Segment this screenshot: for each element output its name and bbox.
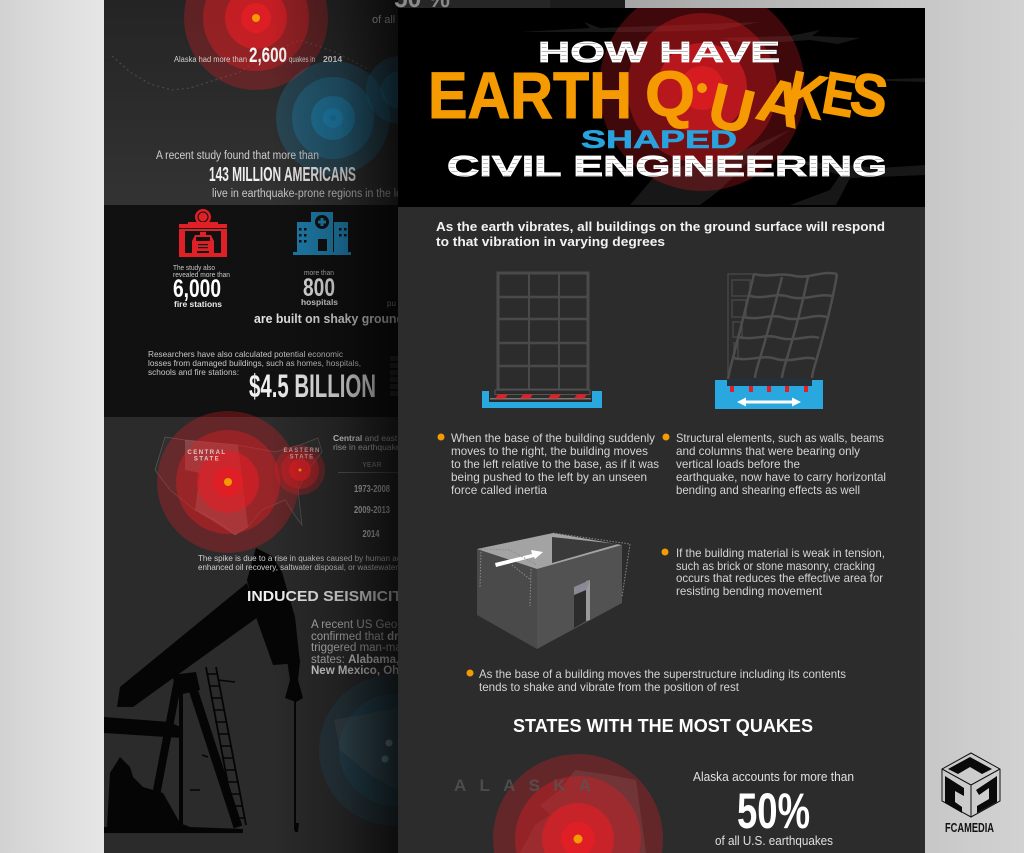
heading: induced seismicity: INDUCED SEISMICIT bbox=[247, 588, 402, 605]
illustration: building at rest bbox=[482, 273, 602, 408]
text: 143 million Americans bbox=[156, 150, 402, 200]
map: Alaska outline bbox=[520, 770, 646, 853]
icon: red quake rings bbox=[599, 0, 805, 191]
text: eastern state label: EASTERN bbox=[283, 448, 321, 454]
text: 143 million Americans: 143 MILLION AMERICANS bbox=[209, 164, 356, 186]
text: inertia bullet: When the base of the building suddenly bbox=[451, 431, 655, 445]
text: spike note: The spike is due to a rise in quakes caused by human act bbox=[198, 553, 404, 563]
title: S bbox=[846, 60, 892, 131]
panel: background infographic page bbox=[104, 0, 398, 853]
text: 800 hospitals bbox=[301, 270, 396, 308]
text: spike note bbox=[198, 555, 398, 572]
title: U bbox=[702, 71, 761, 148]
text: material bullet bbox=[662, 546, 885, 598]
icon: dim blue quake map bbox=[319, 676, 398, 824]
chart: dark bars bbox=[390, 356, 398, 396]
text: 4.5 billion: $4.5 BILLION bbox=[249, 368, 376, 404]
text: induced seismicity body: triggered man-mac bbox=[311, 642, 408, 654]
icon: fire station bbox=[179, 209, 227, 257]
shadow fade near front page bbox=[270, 0, 398, 853]
panel: front page bbox=[398, 0, 925, 853]
text: Alaska 50 percent stat: 50% bbox=[737, 783, 810, 839]
title: E bbox=[818, 59, 861, 130]
table: quake years: 1973-2008 bbox=[354, 484, 390, 495]
illustration: oil pump silhouette bbox=[104, 548, 303, 833]
text: material bullet: occurs that reduces the effective area for bbox=[676, 571, 883, 585]
title: SHAPED bbox=[581, 126, 737, 154]
table: quake years: 2009-2013 bbox=[354, 505, 390, 516]
text: central state label: STATE bbox=[194, 456, 220, 462]
text: inertia bullet bbox=[438, 431, 659, 497]
icon: red quake rings Alaska bbox=[184, 0, 328, 90]
text: superstructure bullet bbox=[466, 667, 846, 694]
illustration: room with bending walls bbox=[477, 533, 630, 649]
text: inertia bullet: being pushed to the left by an unseen bbox=[451, 470, 647, 484]
text: induced seismicity body: confirmed that dri bbox=[311, 631, 402, 643]
text: 6,000 fire stations bbox=[173, 265, 230, 309]
text: economic losses bbox=[148, 351, 360, 375]
text: 2,600 quakes: 2,600 bbox=[249, 44, 287, 67]
text: central and eastern rise bbox=[333, 435, 398, 452]
illustration: building under shaking bbox=[715, 273, 837, 409]
text: 143 million Americans: A recent study found that more than bbox=[156, 150, 319, 162]
icon: central quake rings bbox=[157, 411, 299, 553]
icon: eastern quake rings bbox=[275, 445, 325, 495]
title bbox=[428, 37, 892, 183]
text: built on shaky ground: are built on shaky ground bbox=[254, 312, 404, 326]
title: A bbox=[751, 65, 810, 142]
title: K bbox=[781, 58, 833, 134]
text: Alaska 50 percent stat: of all U.S. earthquakes bbox=[715, 834, 833, 848]
text: Alaska label: ALASKA bbox=[454, 776, 591, 795]
text: 6,000 fire stations: 6,000 bbox=[173, 275, 221, 303]
text: structural elements bullet: bending and shearing effects as well bbox=[676, 483, 860, 497]
text: 2,600 quakes: quakes in bbox=[289, 54, 315, 64]
text: induced seismicity body bbox=[311, 620, 398, 676]
text: inertia bullet: force called inertia bbox=[451, 483, 547, 497]
text: intro heading bbox=[436, 222, 884, 248]
table: quake years bbox=[338, 462, 398, 540]
text: economic losses: losses from damaged buildings, such as homes, hospitals, bbox=[148, 358, 361, 368]
text: structural elements bullet: vertical loads before the bbox=[676, 457, 800, 471]
text: material bullet: If the building material is weak in tension, bbox=[676, 546, 885, 560]
map: central state highlight bbox=[185, 440, 248, 535]
table: quake years: YEAR bbox=[362, 462, 382, 469]
panel: header banner bbox=[398, 0, 925, 207]
map: faint Alaska coast bbox=[112, 40, 370, 90]
text: 2,600 quakes: Alaska had more than bbox=[174, 54, 247, 64]
icon: hospital bbox=[293, 212, 351, 255]
text: 800 hospitals: pu bbox=[387, 299, 396, 308]
text: 6,000 fire stations: The study also bbox=[173, 265, 215, 272]
text: central state label bbox=[188, 450, 225, 460]
text: economic losses: Researchers have also calculated potential economic bbox=[148, 349, 344, 359]
text: Alaska 50 percent stat: Alaska accounts for more than bbox=[693, 770, 854, 784]
text: economic losses: schools and fire stations: bbox=[148, 367, 239, 377]
icon: Alaska quake rings bbox=[493, 754, 663, 853]
decoration: crack lines bbox=[520, 22, 925, 205]
text: intro heading: As the earth vibrates, all buildings on the ground surface will respond bbox=[436, 219, 885, 234]
text: material bullet: resisting bending movement bbox=[676, 584, 823, 598]
text: partial stat top: of all U bbox=[372, 14, 406, 26]
text: induced seismicity body: states: Alabama, A bbox=[311, 654, 410, 666]
text: central and eastern rise: Central and east bbox=[333, 433, 398, 443]
title: HOW HAVE bbox=[538, 37, 780, 69]
text: induced seismicity body: New Mexico, Ohic bbox=[311, 665, 409, 677]
text: spike note: enhanced oil recovery, saltwater disposal, or wastewater bbox=[198, 562, 398, 572]
map: United States outline bbox=[155, 437, 322, 535]
text: Alaska 50 percent stat bbox=[693, 770, 854, 848]
logo: FCAMEDIA: FCAMEDIA bbox=[945, 820, 994, 835]
title: CIVIL ENGINEERING bbox=[447, 151, 887, 183]
text: structural elements bullet: earthquake, now have to carry horizontal bbox=[676, 470, 886, 484]
panel: back page strip above front page bbox=[394, 0, 625, 13]
text: intro heading: to that vibration in varying degrees bbox=[436, 234, 665, 249]
text: central and eastern rise: rise in earthquake bbox=[333, 442, 401, 452]
text: 6,000 fire stations: fire stations bbox=[174, 299, 222, 309]
text: 2,600 quakes bbox=[174, 48, 342, 66]
icon: blue quake rings bbox=[276, 56, 398, 175]
logo: FCAMEDIA bbox=[942, 753, 1000, 835]
text: 2,600 quakes: 2014 bbox=[323, 54, 342, 64]
text: inertia bullet: moves to the right, the building moves bbox=[451, 444, 648, 458]
text: 143 million Americans: live in earthquake-prone regions in the lo bbox=[212, 188, 402, 200]
text: structural elements bullet: Structural elements, such as walls, beams bbox=[676, 431, 884, 445]
text: superstructure bullet: tends to shake and vibrate from the position of rest bbox=[479, 680, 740, 694]
title: Q bbox=[645, 58, 695, 130]
text: structural elements bullet bbox=[662, 431, 886, 497]
table: quake years: 2014 bbox=[362, 529, 380, 540]
text: eastern state label bbox=[284, 448, 319, 458]
text: 800 hospitals: 800 bbox=[303, 274, 335, 302]
text: structural elements bullet: and columns that were bearing only bbox=[676, 444, 860, 458]
text: inertia bullet: to the left relative to the base, as if it was bbox=[451, 457, 659, 471]
heading: states with the most quakes: STATES WITH THE MOST QUAKES bbox=[513, 716, 813, 736]
text: 800 hospitals: more than bbox=[304, 270, 334, 277]
text: central state label: CENTRAL bbox=[187, 450, 227, 456]
text: superstructure bullet: As the base of a building moves the superstructure including its contents bbox=[479, 667, 846, 681]
text: eastern state label: STATE bbox=[290, 454, 314, 460]
text: material bullet: such as brick or stone masonry, cracking bbox=[676, 559, 875, 573]
title: EARTH bbox=[428, 58, 632, 132]
text: induced seismicity body: A recent US Geoloc bbox=[311, 619, 412, 631]
text: 6,000 fire stations: revealed more than bbox=[173, 272, 230, 279]
text: 800 hospitals: hospitals bbox=[301, 297, 338, 307]
